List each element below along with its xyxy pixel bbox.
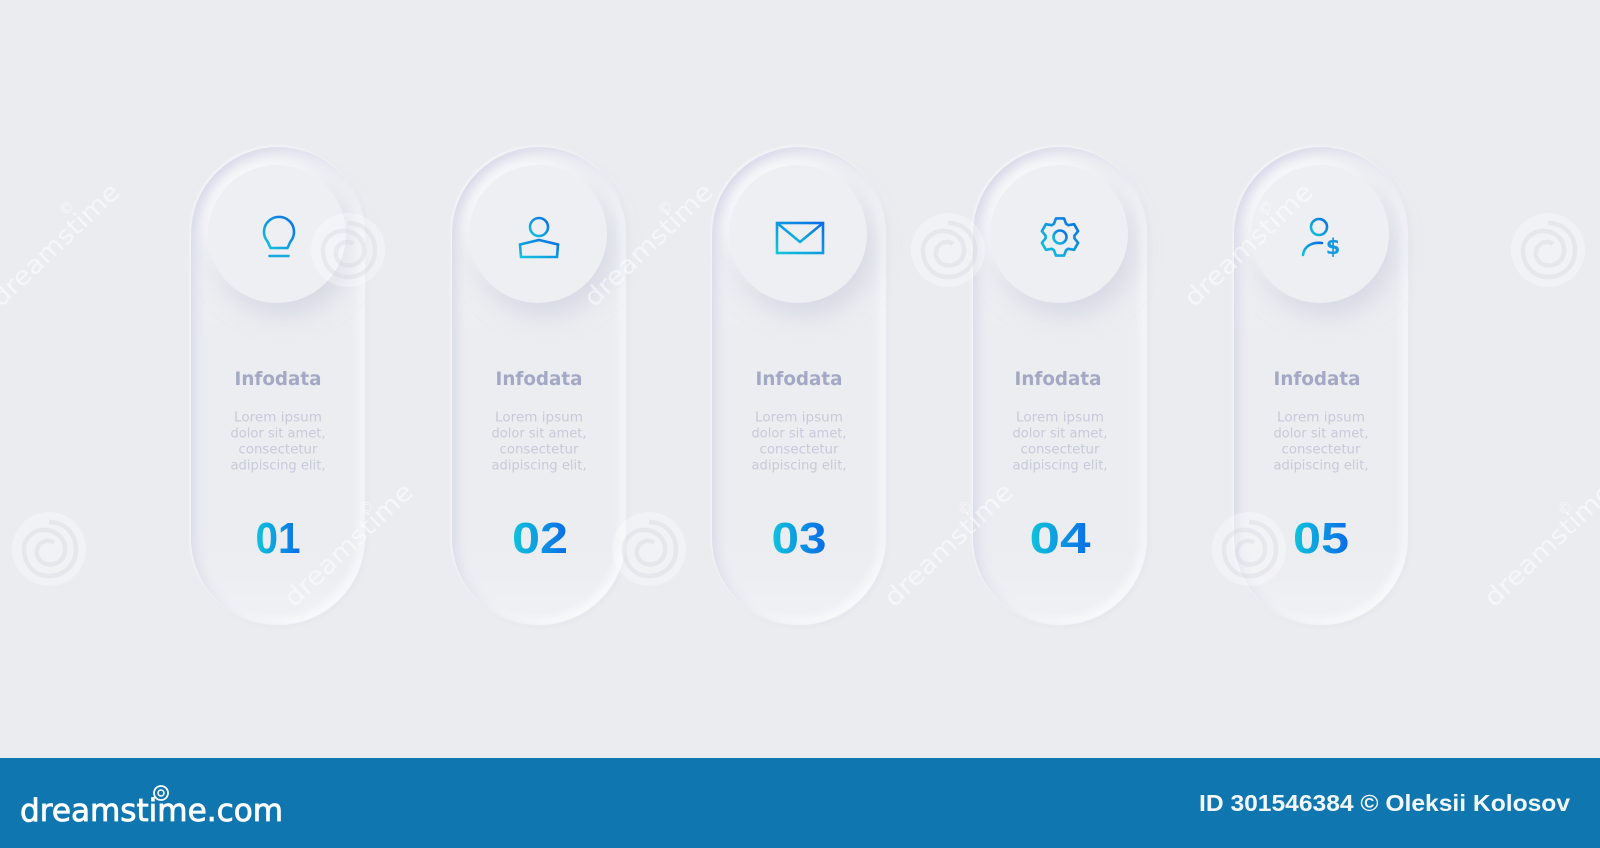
step text: adipiscing elit, (230, 458, 326, 474)
watermark overlay: © (58, 199, 74, 217)
step text: consectetur (1020, 442, 1100, 458)
step text: dolor sit amet, (230, 426, 326, 442)
step text: consectetur (760, 442, 839, 458)
step text: dolor sit amet, (1012, 426, 1108, 442)
step text: Lorem ipsum (1016, 410, 1104, 426)
step text: consectetur (238, 442, 318, 458)
step text: 04 (1030, 514, 1091, 563)
step text: Infodata (1274, 368, 1360, 390)
step text: Lorem ipsum (495, 410, 583, 426)
panel: step 01 (191, 147, 365, 625)
step text: consectetur (1282, 442, 1361, 458)
step text: adipiscing elit, (492, 458, 586, 474)
step text: consectetur (500, 442, 579, 458)
footer logo: dreamstime.com (20, 793, 283, 829)
image id and author: ID 301546384 © Oleksii Kolosov (1199, 790, 1570, 816)
watermark overlay: dreamstime (578, 177, 719, 312)
footer band (0, 758, 1600, 848)
step text: Infodata (496, 368, 582, 390)
watermark overlay: © (358, 499, 374, 517)
step text: 01 (256, 514, 300, 563)
step text: adipiscing elit, (1012, 458, 1108, 474)
step text (492, 368, 586, 563)
step text: 05 (1293, 514, 1349, 563)
panel: step 03 (712, 147, 886, 625)
icon: person with dollar (1251, 165, 1389, 303)
icon: envelope (729, 165, 867, 303)
step text: 02 (512, 514, 568, 563)
watermark overlay: © (1258, 199, 1272, 217)
watermark overlay: dreamstime (1178, 177, 1319, 312)
icon: gear (990, 165, 1128, 303)
icon: person with dollar: $ (1326, 235, 1340, 259)
step text: dolor sit amet, (1274, 426, 1368, 442)
step text: Lorem ipsum (755, 410, 843, 426)
step text: Infodata (756, 368, 842, 390)
panel: step 05 (1234, 147, 1408, 625)
panel: step 04 (973, 147, 1147, 625)
step text (1012, 368, 1108, 563)
step text: dolor sit amet, (492, 426, 586, 442)
watermark overlay: dreamstime (878, 477, 1019, 612)
icon: light bulb (208, 165, 346, 303)
step text: dolor sit amet, (752, 426, 846, 442)
step text (752, 368, 846, 563)
icon: person (469, 165, 607, 303)
watermark overlay: © (958, 499, 972, 517)
panel: step 02 (452, 147, 626, 625)
step text: 03 (772, 514, 826, 563)
step text: adipiscing elit, (1274, 458, 1368, 474)
step text: Infodata (234, 368, 322, 390)
watermark overlay: © (1558, 499, 1572, 517)
watermark overlay: dreamstime (278, 477, 419, 612)
step text: Infodata (1014, 368, 1102, 390)
step text: Lorem ipsum (1277, 410, 1365, 426)
watermark overlay: © (658, 199, 672, 217)
step text: adipiscing elit, (752, 458, 846, 474)
step text: Lorem ipsum (234, 410, 322, 426)
step text (230, 368, 326, 563)
step text (1274, 368, 1368, 563)
